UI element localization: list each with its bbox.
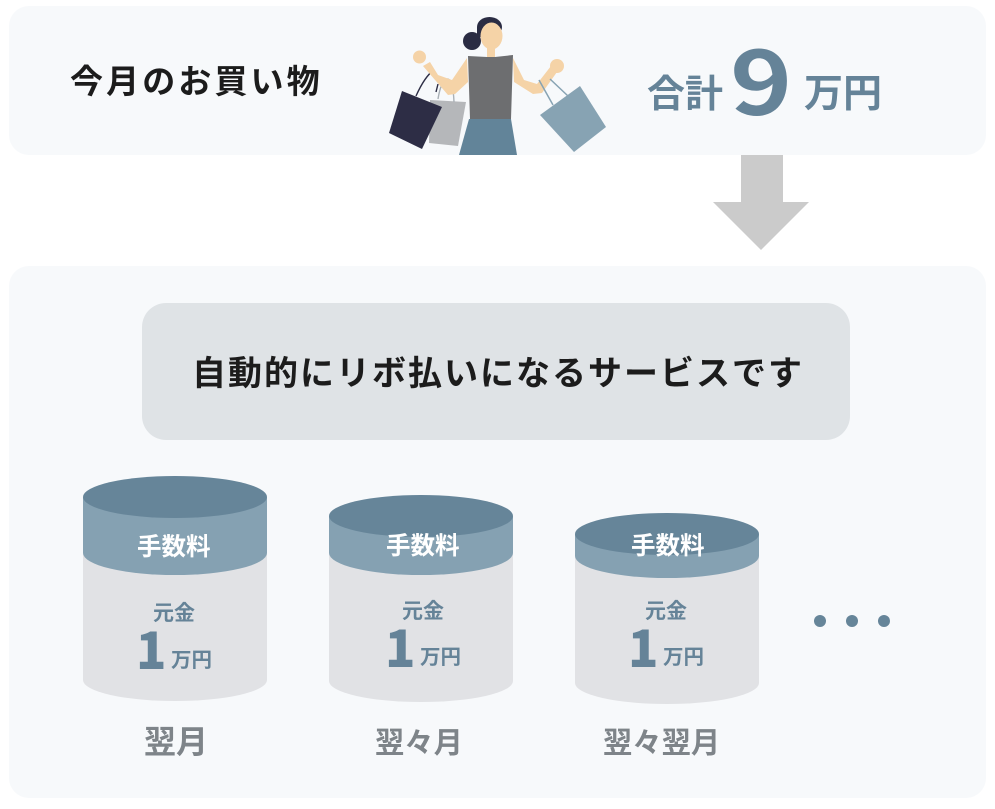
panel: this month's shopping — [9, 6, 986, 155]
total amount — [647, 13, 882, 140]
cylinder: third month: 万円 — [663, 646, 704, 669]
label: third month: 翌々翌月 — [603, 727, 720, 760]
cylinder: month after next — [329, 495, 513, 702]
cylinder: next month: 手数料 — [137, 533, 210, 561]
arrow: down — [713, 155, 809, 250]
cylinder: month after next: 手数料 — [386, 532, 460, 560]
cylinder: third month: 手数料 — [631, 532, 704, 560]
ellipsis dots — [814, 615, 890, 627]
label: month after next: 翌々月 — [375, 727, 463, 760]
total amount: 合計 — [647, 74, 723, 116]
cylinder: third month: 1 — [628, 610, 658, 682]
cylinder: next month: 万円 — [171, 649, 212, 672]
cylinder: next month: 1 — [136, 612, 166, 684]
cylinder: month after next: 1 — [385, 610, 415, 682]
label: next month: 翌月 — [144, 724, 208, 760]
cylinder: next month — [83, 476, 267, 701]
cylinder: month after next: 元金 — [402, 600, 444, 623]
total amount: 万円 — [804, 73, 882, 116]
cylinder: next month: 元金 — [153, 602, 195, 625]
banner: automatic revolving payment — [142, 303, 850, 440]
panel: revolving payment explanation — [9, 266, 986, 798]
cylinder: third month: 元金 — [645, 600, 687, 623]
cylinder: month after next: 万円 — [420, 646, 461, 669]
total amount: 9 — [730, 13, 792, 140]
heading: this month's shopping: 今月のお買い物 — [70, 63, 323, 100]
cylinder: third month — [575, 513, 759, 704]
illustration: woman with shopping bags — [389, 17, 606, 155]
banner: automatic revolving payment: 自動的にリボ払いになるサービスです — [192, 355, 804, 393]
